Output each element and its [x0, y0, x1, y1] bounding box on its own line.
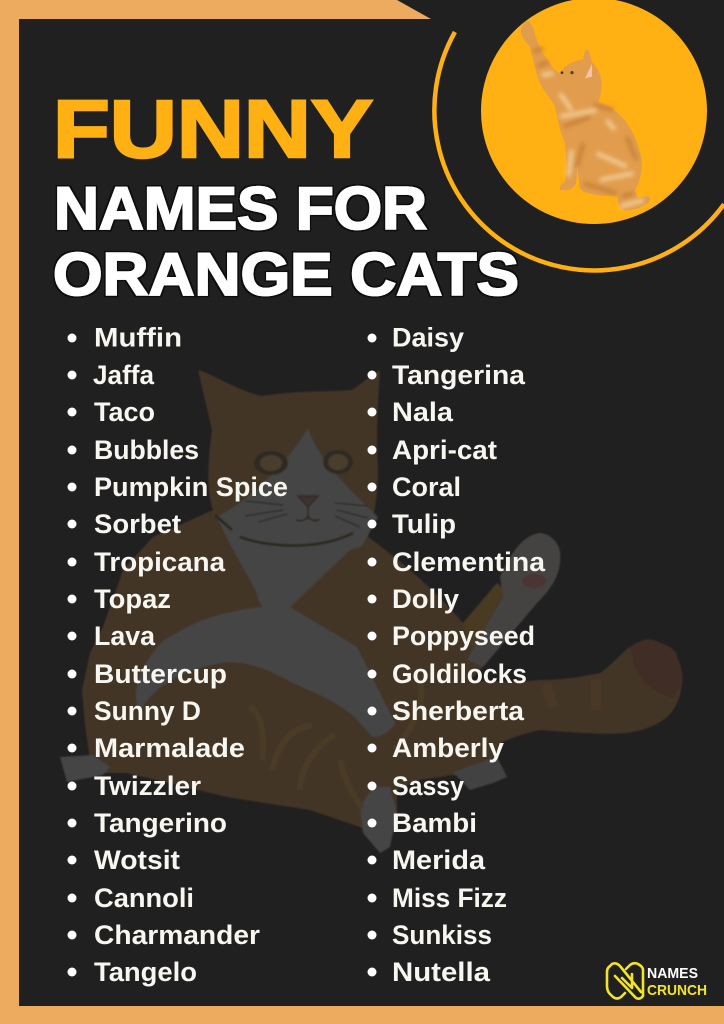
names list: left column: Sunny D [94, 696, 201, 726]
leg stripes [250, 680, 421, 808]
logo: Names Crunch [607, 963, 707, 999]
names list: left column: Charmander [94, 920, 261, 950]
names list: left column: Cannoli [94, 883, 194, 913]
names list: right column: Dolly [392, 584, 459, 614]
names list: right column: Miss Fizz [392, 883, 507, 913]
names list: left column: Buttercup [94, 659, 227, 689]
cat fur shading [533, 48, 643, 207]
nose and mouth [296, 496, 320, 521]
names list: left column: Lava [94, 621, 156, 651]
paw pad [522, 574, 546, 588]
cat body and head [82, 370, 682, 840]
names list: left column: Marmalade [94, 733, 245, 763]
right paw [453, 757, 507, 790]
names list: right column: Coral [392, 472, 461, 502]
title line: ORANGE CATS: ORANGE CATS [53, 241, 519, 308]
names list: right column: Sunkiss [392, 920, 492, 950]
names list: right column: Nala [392, 397, 454, 427]
names list: right column: Merida [392, 845, 486, 875]
names list: right column: Poppyseed [392, 621, 535, 651]
logo wordmark: NAMES: NAMES [647, 965, 698, 982]
names list: right column: Clementina [392, 547, 546, 577]
names list: left column: Tangelo [94, 957, 197, 987]
names list: left column: Tangerino [94, 808, 227, 838]
names list: left column: Pumpkin Spice [94, 472, 288, 502]
white chest and belly [136, 428, 395, 737]
title [53, 84, 519, 308]
names list: right column: Amberly [392, 733, 504, 763]
names list: right column: Tulip [392, 509, 456, 539]
logo wordmark: CRUNCH: CRUNCH [647, 982, 707, 999]
names list: right column: Daisy [392, 322, 464, 352]
raised paw [467, 533, 560, 667]
names list: left column: Wotsit [94, 845, 180, 875]
names list: right column: Apri-cat [392, 435, 497, 465]
names list: left column: Jaffa [93, 360, 155, 390]
title line: FUNNY: FUNNY [53, 84, 373, 175]
background cat illustration [60, 370, 682, 853]
whiskers [245, 501, 368, 527]
names list: right column: Bambi [392, 808, 477, 838]
names list: right column: Sassy [392, 771, 464, 801]
names list: left column: Bubbles [94, 435, 199, 465]
names list: left column: Tropicana [94, 547, 226, 577]
collar line [215, 515, 353, 546]
yellow circle [481, 0, 707, 224]
eyes [254, 451, 288, 475]
names list: left column: Taco [94, 397, 155, 427]
names list: right column: Sherberta [392, 696, 525, 726]
names list: left column: Topaz [94, 584, 171, 614]
names list: right column [368, 322, 546, 987]
names list: left column: Twizzler [94, 771, 201, 801]
outer ring arc [434, 32, 724, 270]
logo icon [607, 963, 643, 999]
tail tip [630, 640, 682, 698]
tail stripes [546, 680, 596, 710]
names list: left column: Sorbet [94, 509, 181, 539]
names list: left column: Muffin [94, 322, 182, 352]
left paw [60, 755, 110, 782]
title line: NAMES FOR: NAMES FOR [54, 175, 427, 242]
names list: right column: Tangerina [392, 360, 526, 390]
names list: right column: Nutella [392, 957, 491, 987]
lower paw [360, 787, 397, 853]
icon: orange cat reaching up [521, 21, 650, 211]
names list: left column [68, 322, 288, 987]
names list: right column: Goldilocks [392, 659, 527, 689]
raised arm fur [463, 583, 505, 650]
